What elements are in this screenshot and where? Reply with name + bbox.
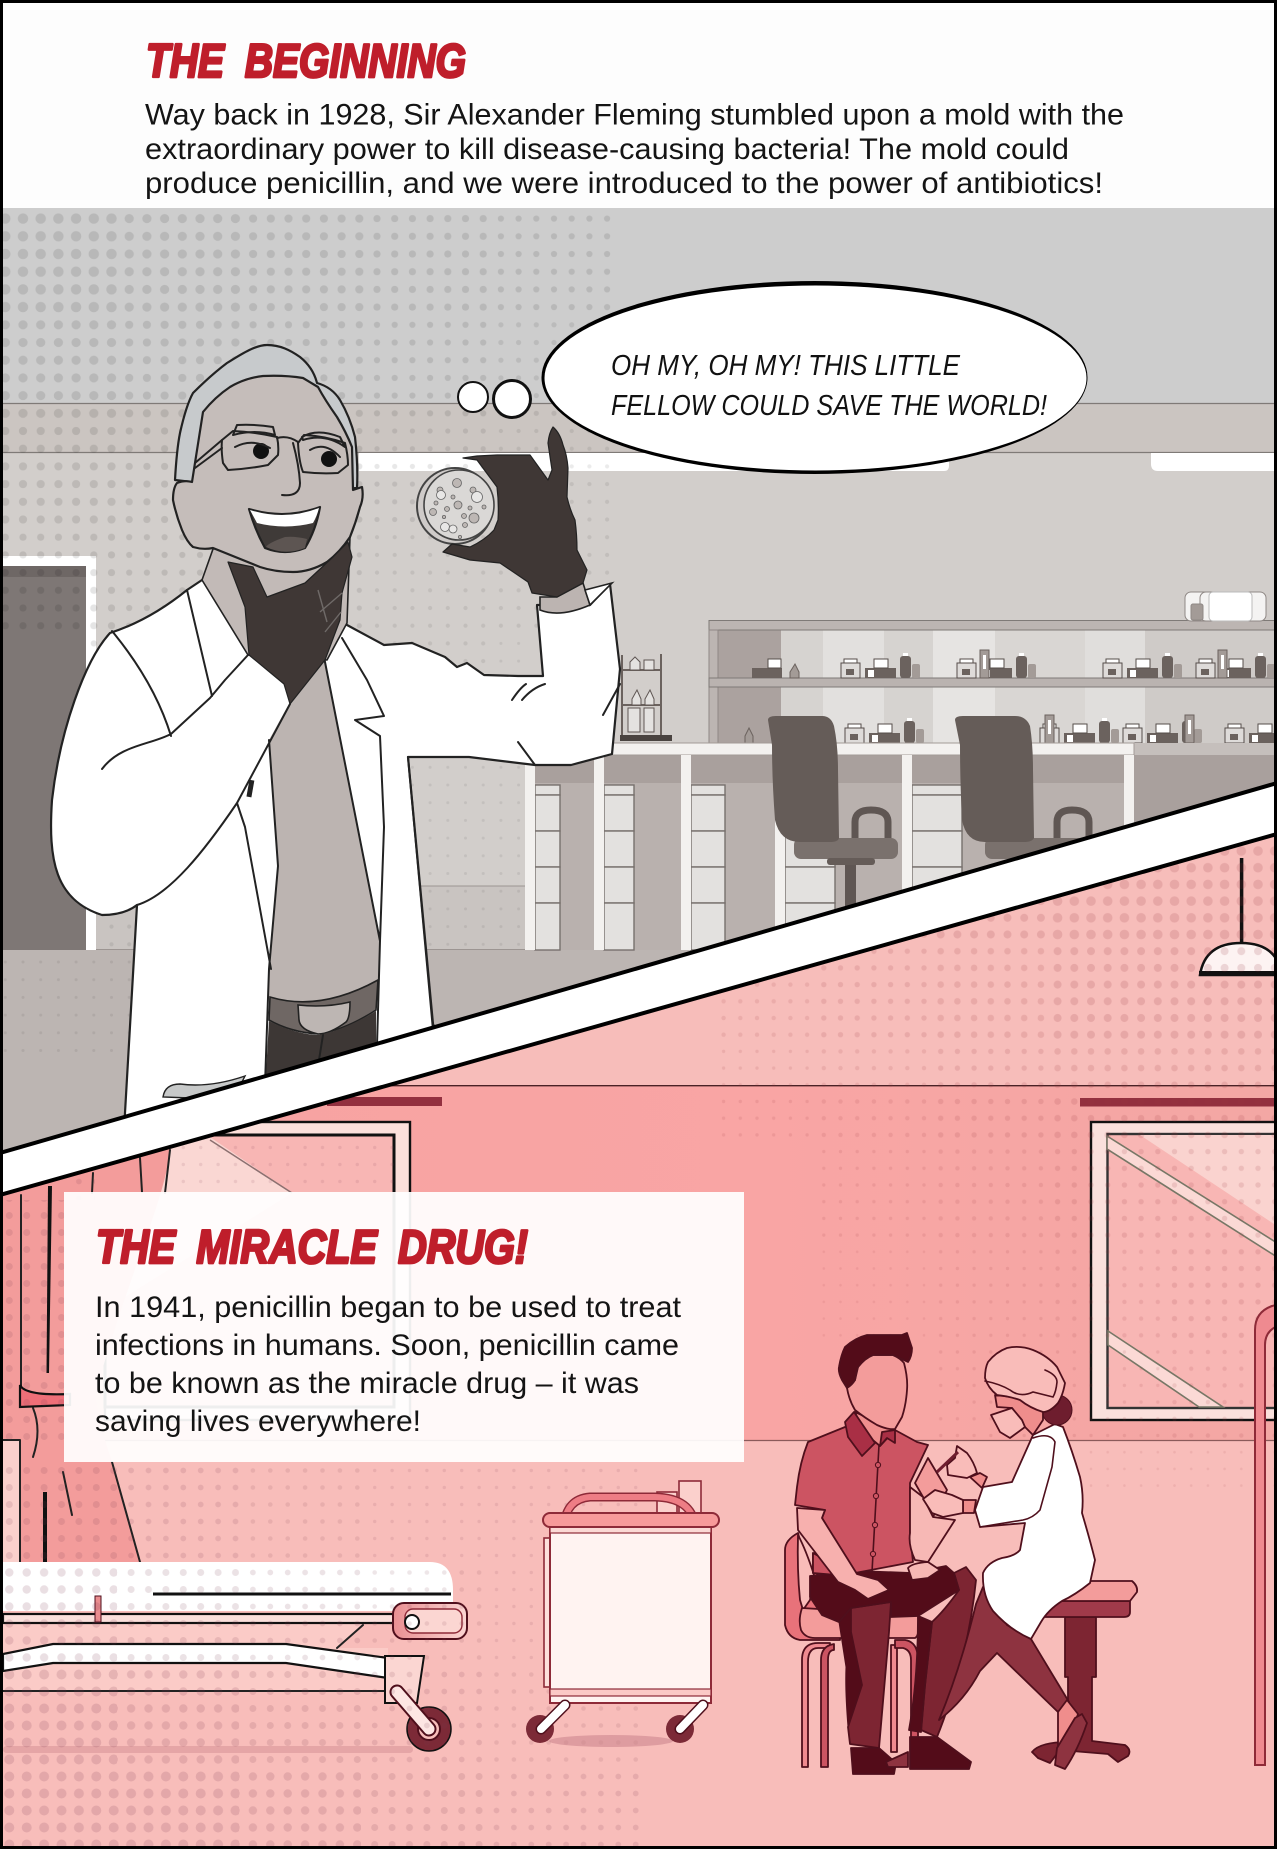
patient chair back <box>785 1533 840 1640</box>
bench legs <box>525 755 1134 950</box>
patient near trouser leg <box>848 1602 891 1748</box>
curved pipe <box>1255 1304 1277 1765</box>
panel: the beginning header <box>3 3 1274 208</box>
patient far leg dark <box>909 1616 932 1732</box>
speech bubble <box>542 281 1088 474</box>
figure: nurse <box>923 1347 1137 1769</box>
halftone dots: hospital wall <box>699 843 1277 1494</box>
lab coat <box>51 537 620 1130</box>
nurse upper cuff <box>970 1473 987 1488</box>
cart wheels <box>526 1715 554 1743</box>
door <box>0 556 96 950</box>
medical cart <box>526 1481 719 1747</box>
patient forearm <box>910 1487 955 1562</box>
hair <box>175 345 357 492</box>
bed shadow <box>3 1746 413 1753</box>
stool <box>1032 1581 1137 1763</box>
nurse shoe <box>1055 1714 1087 1769</box>
patient chair legs <box>802 1640 918 1767</box>
mouth <box>249 507 320 552</box>
hospital bed <box>3 1562 467 1753</box>
eyebrows <box>233 425 345 447</box>
flask stand <box>620 654 672 741</box>
patient neck <box>855 1412 895 1446</box>
patient near leg dark <box>839 1608 862 1727</box>
heading: the miracle drug: THE MIRACLE DRUG! <box>96 1220 528 1273</box>
ceiling bars <box>327 1097 1277 1106</box>
shirt <box>269 653 380 1014</box>
coat pocket <box>163 1076 245 1098</box>
cart body <box>550 1527 711 1703</box>
cart shadow <box>549 1735 673 1747</box>
bench drawers <box>535 785 962 950</box>
shelf bottles <box>745 650 1277 743</box>
text block: 1941 penicillin use: to be known as the miracle drug – it was <box>95 1367 639 1400</box>
shirt placket and buttons <box>870 1445 881 1572</box>
hospital walls and floor <box>0 830 1277 1849</box>
text block: 1941 penicillin use <box>95 1291 682 1438</box>
coat seams <box>102 590 620 1085</box>
curtain tie <box>20 1385 70 1407</box>
panel: hospital scene <box>0 830 1277 1849</box>
speech text: FELLOW COULD SAVE THE WORLD! <box>611 390 1047 422</box>
nurse lower cuff <box>963 1500 976 1513</box>
cuff fold <box>585 583 612 605</box>
patient chair seat <box>800 1608 919 1638</box>
cart top <box>543 1513 719 1527</box>
nurse upper hand <box>947 1446 977 1478</box>
rail <box>3 1614 398 1623</box>
bed wheel <box>407 1707 451 1751</box>
nurse cap folds <box>985 1370 1057 1397</box>
halftone dots: hospital floor <box>0 1462 643 1849</box>
cart side <box>544 1538 550 1687</box>
halftone dots: lab <box>0 210 616 1059</box>
mattress <box>3 1562 453 1611</box>
text block: 1941 penicillin use: saving lives everywhere! <box>95 1405 421 1438</box>
text block: 1928 discovery: produce penicillin, and we were introduced to the power of antibiotics! <box>145 167 1103 200</box>
neck <box>202 537 350 660</box>
lower frame <box>3 1623 388 1691</box>
belt buckle <box>298 1002 350 1034</box>
patient shoes <box>851 1737 971 1774</box>
nurse bun <box>1042 1395 1072 1425</box>
white cases on shelf <box>1185 592 1266 621</box>
patient collar <box>845 1412 895 1456</box>
eyes <box>235 443 340 467</box>
nurse lower hand <box>923 1490 963 1517</box>
patient shirt <box>795 1427 928 1573</box>
floor patch left of curtain <box>3 1440 20 1565</box>
panel: laboratory scene <box>0 208 1277 1169</box>
figure: Alexander Fleming <box>51 345 620 1130</box>
cart bottles <box>679 1481 701 1515</box>
bed bar <box>3 1644 388 1678</box>
cart handle <box>564 1497 695 1526</box>
nose <box>282 443 300 495</box>
ceiling lights <box>359 453 1277 471</box>
shelf unit <box>709 592 1277 744</box>
office chair 2 <box>955 716 1089 859</box>
bed handle <box>393 1603 467 1639</box>
patient hair <box>839 1333 912 1388</box>
right window <box>1091 1122 1277 1420</box>
shirt hem <box>813 1553 855 1575</box>
lab bench <box>525 743 1277 955</box>
callout: the miracle drug <box>64 1192 744 1462</box>
nurse face <box>995 1395 1043 1435</box>
speech text: OH MY, OH MY! THIS LITTLE <box>611 350 961 382</box>
syringe <box>937 1452 958 1472</box>
belt <box>269 980 378 1034</box>
text block: 1928 discovery: Way back in 1928, Sir Alexander Fleming stumbled upon a mold with the <box>145 98 1124 132</box>
thought bubbles <box>458 380 530 418</box>
nurse sleeve line <box>980 1436 1055 1527</box>
patient far trouser leg <box>921 1567 976 1737</box>
curtain <box>3 1140 395 1562</box>
ceiling lamp <box>1199 858 1277 976</box>
curtain dots <box>3 1200 65 1440</box>
text block: 1941 penicillin use: infections in humans. Soon, penicillin came <box>95 1329 679 1362</box>
text block: 1941 penicillin use: In 1941, penicillin began to be used to treat <box>95 1291 682 1324</box>
figure: patient <box>785 1333 976 1774</box>
speech text <box>611 350 1047 422</box>
heading: the beginning: THE BEGINNING <box>146 34 466 87</box>
trousers <box>266 1011 376 1074</box>
glasses <box>195 431 348 473</box>
office chair 1 <box>768 716 898 911</box>
patient upper bare arm <box>915 1458 947 1517</box>
nurse ankle <box>1058 1700 1078 1748</box>
nurse legs <box>939 1587 1069 1720</box>
nurse rear shoe behind patient <box>886 1752 908 1767</box>
text block: 1928 discovery: extraordinary power to kill disease-causing bacteria! The mold could <box>145 133 1069 166</box>
face <box>173 376 363 572</box>
patient chair inner <box>798 1535 814 1610</box>
patient hand on knee <box>908 1562 940 1580</box>
patient arm and hand <box>797 1508 889 1599</box>
gloved hand holding dish <box>443 427 587 597</box>
nurse cap <box>985 1347 1065 1412</box>
text block: 1928 discovery <box>145 98 1124 200</box>
nurse coat <box>975 1424 1095 1639</box>
bed bracket <box>385 1656 424 1703</box>
patient lap <box>810 1566 959 1622</box>
lab wall and ceiling <box>0 208 1277 1169</box>
nurse mask <box>991 1408 1025 1438</box>
petri dish <box>417 468 494 544</box>
forearm <box>540 583 590 613</box>
gloved hand on chin <box>228 542 352 704</box>
patient face <box>847 1355 907 1429</box>
left window <box>105 1122 410 1420</box>
